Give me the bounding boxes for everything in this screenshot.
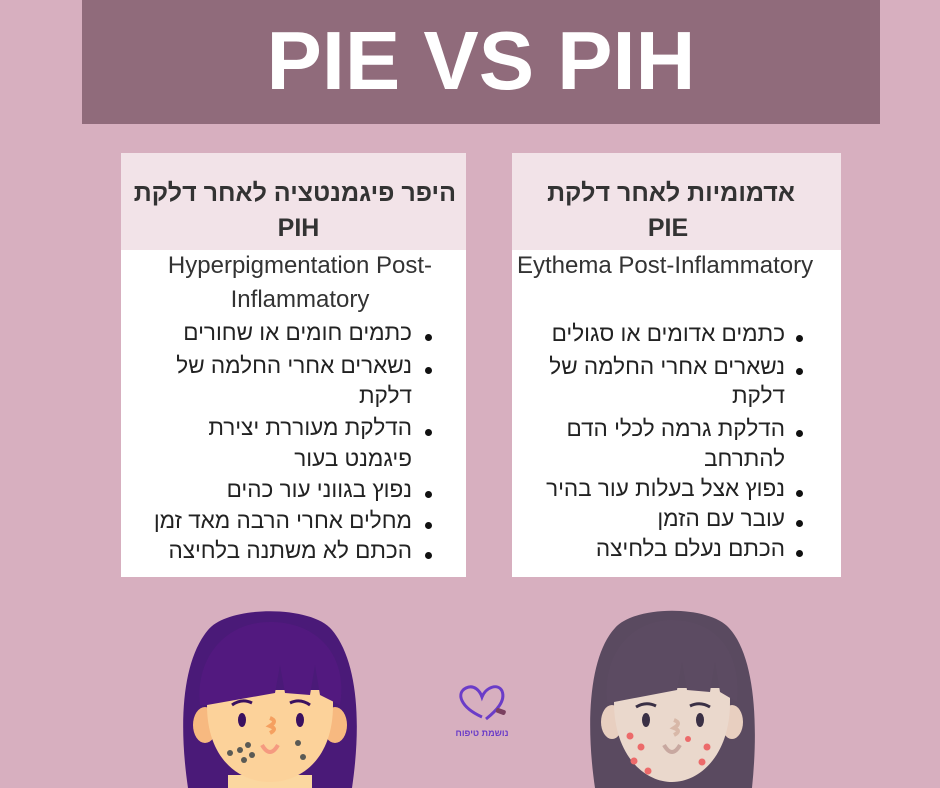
bullet list PIE: הכתם נעלם בלחיצה (596, 536, 785, 561)
bullet list PIE: כתמים אדומים או סגולים (552, 321, 785, 346)
bullet list PIH: מחלים אחרי הרבה מאד זמן (154, 508, 412, 533)
bullet list PIE (546, 321, 803, 561)
bullet list PIH: פיגמנט בעור (294, 446, 412, 471)
title band (82, 0, 880, 124)
bullet list PIE: נפוץ אצל בעלות עור בהיר (546, 476, 785, 501)
bullet list PIE: הדלקת גרמה לכלי הדם (566, 416, 785, 441)
panel header PIH (121, 153, 466, 250)
bullet list PIE: עובר עם הזמן (657, 506, 785, 531)
english subtitle PIH: Inflammatory (231, 286, 369, 313)
bullet list PIE: להתרחב (704, 446, 785, 471)
panel header PIE: PIE (648, 214, 688, 242)
bullet list PIH (154, 320, 432, 563)
english subtitle PIH: Hyperpigmentation Post- (168, 252, 432, 279)
title: PIE VS PIH (266, 14, 695, 107)
english subtitle PIH (168, 252, 432, 313)
logo: נושמת טיפוח (456, 728, 508, 738)
bullet list PIH: נפוץ בגווני עור כהים (227, 477, 412, 502)
bullet list PIH: כתמים חומים או שחורים (183, 320, 412, 345)
panel header PIH: היפר פיגמנטציה לאחר דלקת (134, 179, 456, 207)
bullet list PIH: הכתם לא משתנה בלחיצה (168, 538, 412, 563)
illustration: girl with PIE (590, 610, 755, 788)
english subtitle PIE: Eythema Post-Inflammatory (517, 252, 813, 279)
panel header PIH: PIH (278, 214, 319, 242)
panel header PIE: אדמומיות לאחר דלקת (547, 179, 795, 207)
bullet list PIH: הדלקת מעוררת יצירת (208, 415, 412, 440)
bullet list PIH: דלקת (359, 383, 412, 408)
logo (456, 685, 508, 738)
panel: PIH (121, 153, 466, 577)
bullet list PIE: נשארים אחרי החלמה של (549, 354, 785, 379)
panel: PIE (512, 153, 841, 577)
panel header PIE (512, 153, 841, 250)
bullet list PIE: דלקת (732, 383, 785, 408)
bullet list PIH: נשארים אחרי החלמה של (176, 353, 412, 378)
illustration: girl with PIH (183, 611, 357, 788)
